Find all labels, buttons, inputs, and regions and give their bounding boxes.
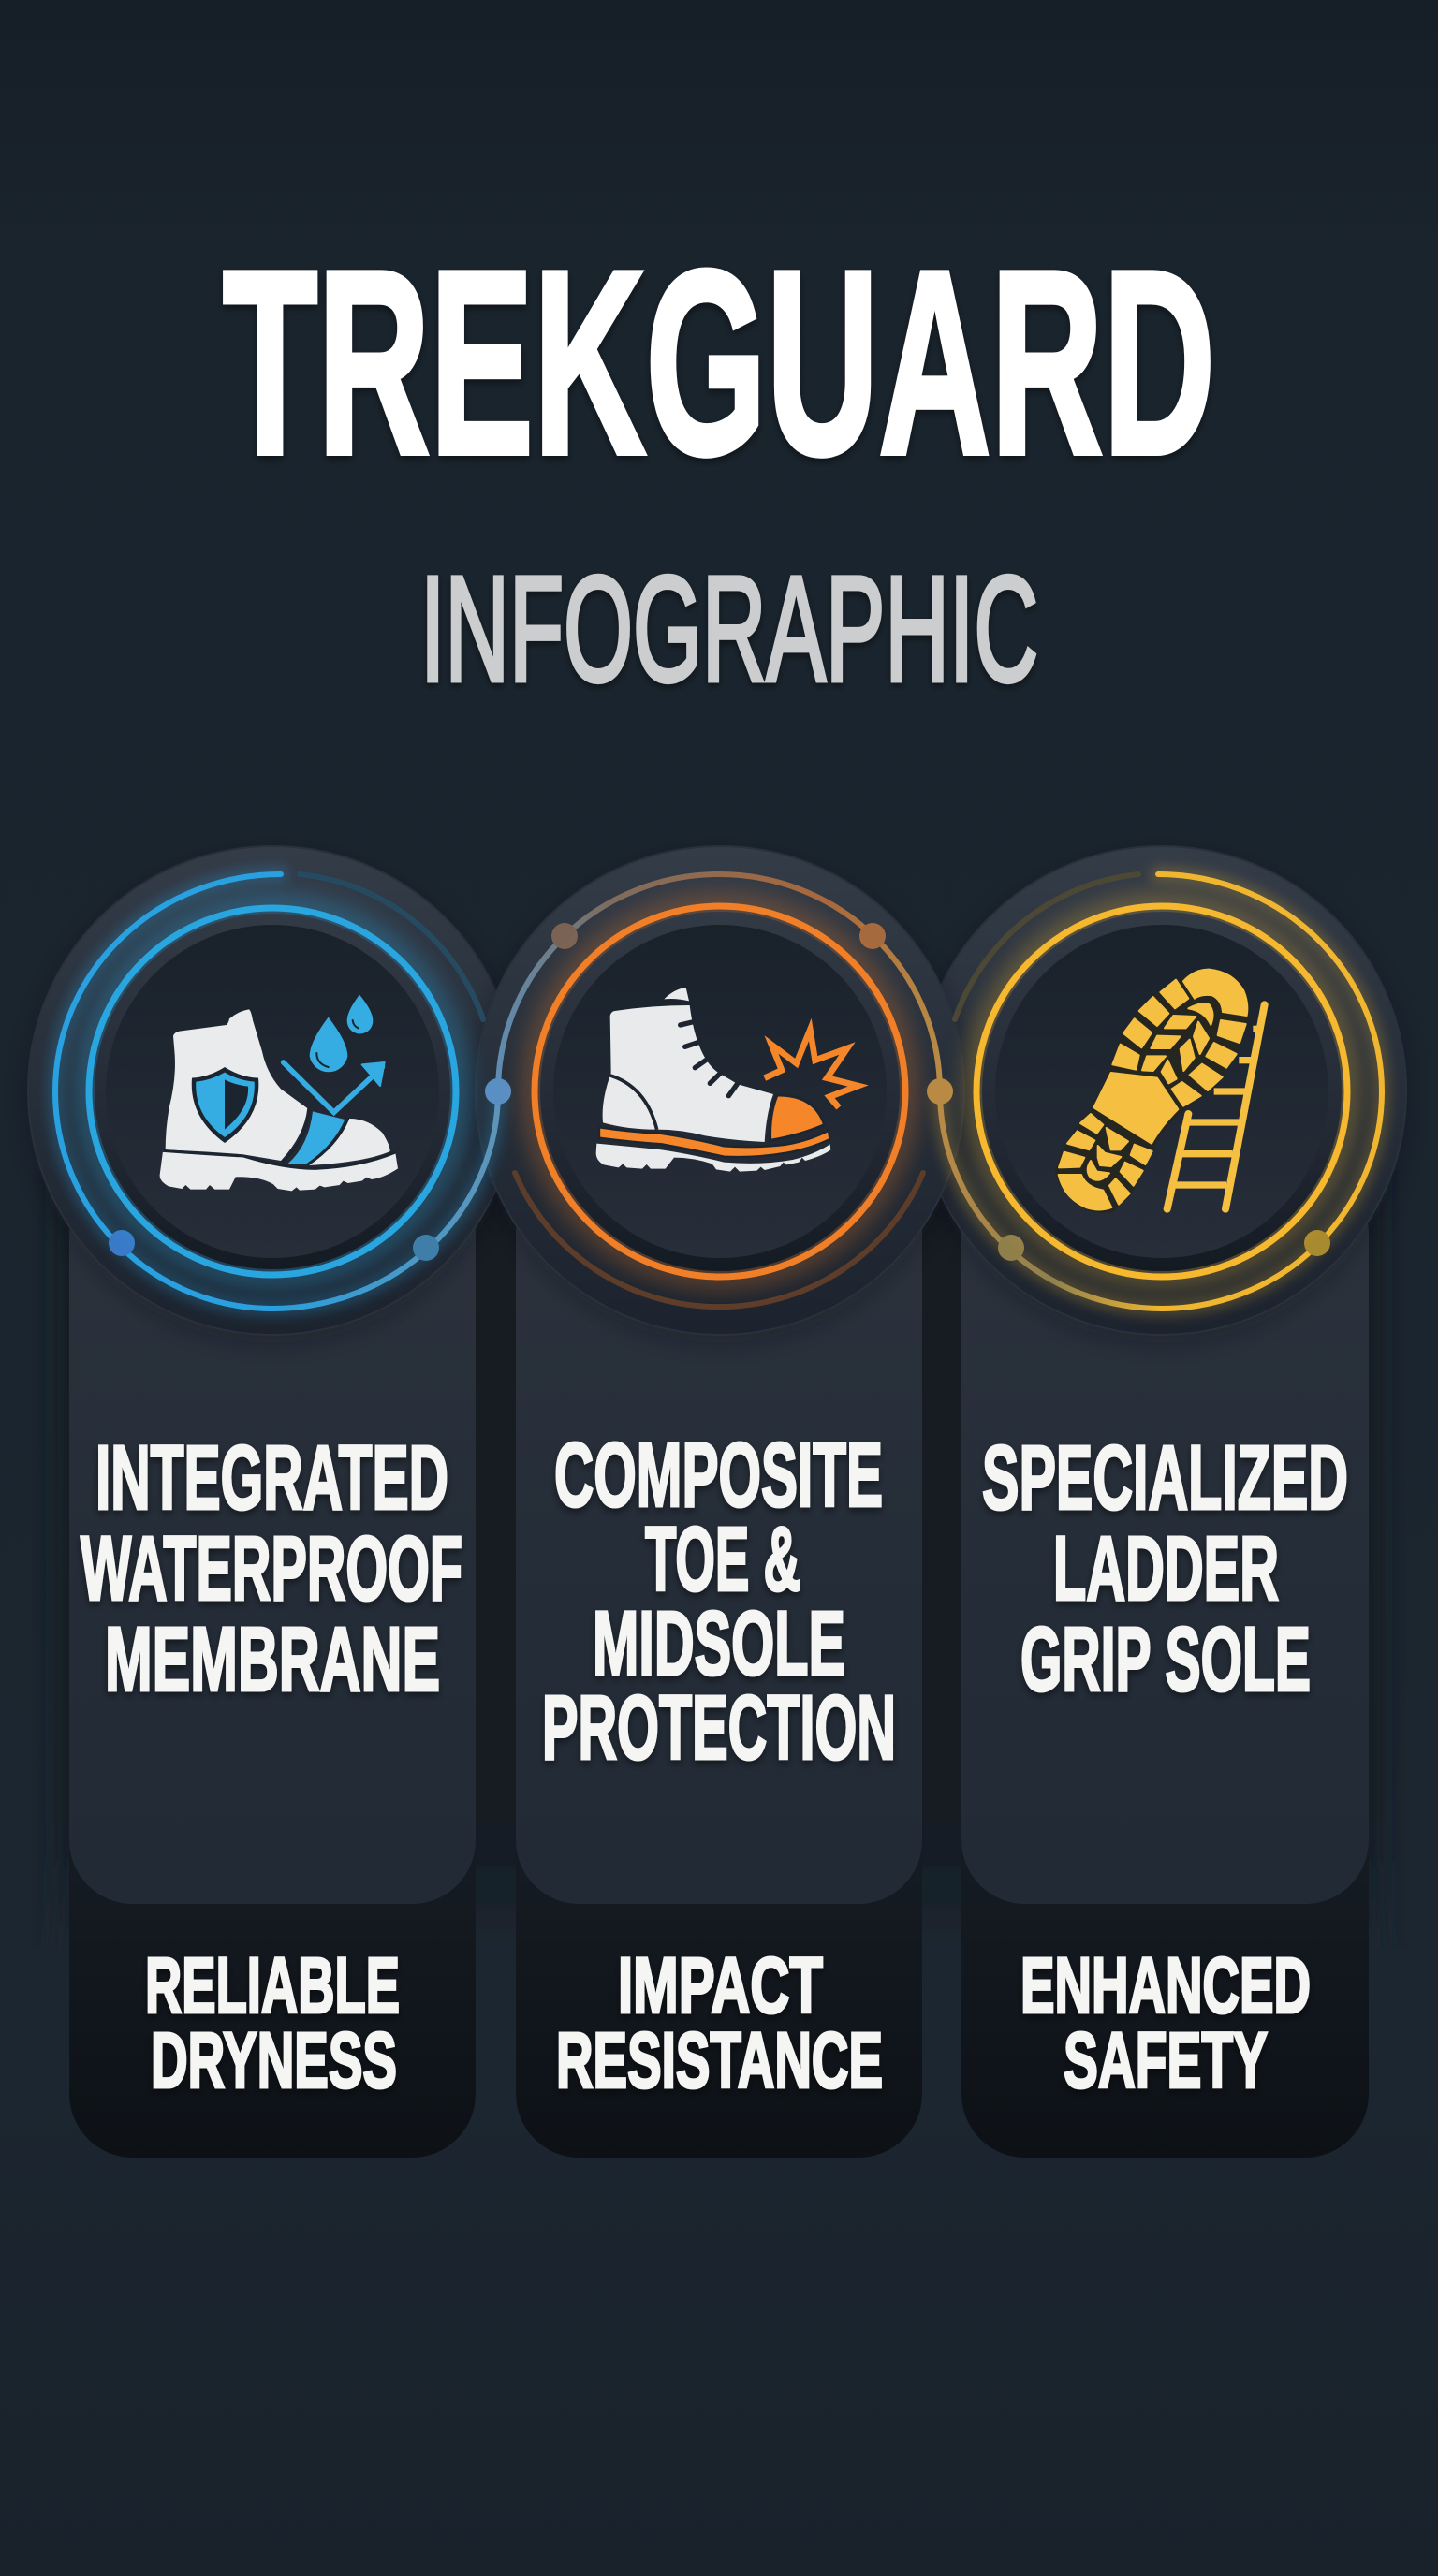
icon: composite toe boot with impact burst: [596, 988, 858, 1172]
subtitle: INFOGRAPHIC: [420, 545, 1038, 712]
text: enhanced safety benefit: SAFETY: [1064, 2016, 1268, 2104]
text: waterproof feature: INTEGRATED: [95, 1427, 448, 1529]
text: composite toe feature: MIDSOLE: [593, 1592, 845, 1694]
icon: waterproof boot with shield and droplets: [160, 995, 398, 1191]
medallion base: yellow: [917, 846, 1407, 1342]
text: composite toe feature: COMPOSITE: [554, 1424, 883, 1526]
progress nodes: [109, 923, 1330, 1261]
text: ladder grip feature: [982, 1427, 1348, 1710]
medallion: ladder grip: [976, 906, 1347, 1277]
text: composite toe feature: [542, 1424, 896, 1778]
panel shadows: [58, 1170, 1380, 1947]
medallion: composite toe: [535, 906, 905, 1277]
text: reliable dryness benefit: [145, 1941, 400, 2104]
text: impact resistance benefit: [556, 1941, 883, 2104]
panel: impact benefit base: [516, 1778, 922, 2158]
panel: waterproof benefit base: [69, 1778, 476, 2158]
text: waterproof feature: [81, 1427, 462, 1710]
text: impact resistance benefit: RESISTANCE: [556, 2016, 883, 2104]
outer progress wave line: [55, 874, 1382, 1309]
panel: waterproof feature card: [69, 1170, 476, 1904]
panel: ladder grip feature card: [961, 1170, 1369, 1904]
text: reliable dryness benefit: DRYNESS: [151, 2016, 397, 2104]
panel: composite toe feature card: [516, 1170, 922, 1904]
text: waterproof feature: WATERPROOF: [81, 1517, 462, 1619]
medallion base: blue: [27, 846, 518, 1342]
text: reliable dryness benefit: RELIABLE: [145, 1941, 400, 2029]
text: composite toe feature: TOE &: [645, 1508, 800, 1610]
icon: ladder grip sole and ladder: [1055, 970, 1265, 1213]
text: enhanced safety benefit: [1020, 1941, 1311, 2104]
panel: safety benefit base: [961, 1778, 1369, 2158]
text: impact resistance benefit: IMPACT: [618, 1941, 823, 2029]
text: composite toe feature: PROTECTION: [542, 1676, 896, 1778]
text: waterproof feature: MEMBRANE: [105, 1608, 440, 1710]
medallion: waterproof: [87, 906, 458, 1277]
medallion base: orange: [475, 846, 965, 1342]
text: ladder grip feature: LADDER: [1053, 1517, 1279, 1619]
